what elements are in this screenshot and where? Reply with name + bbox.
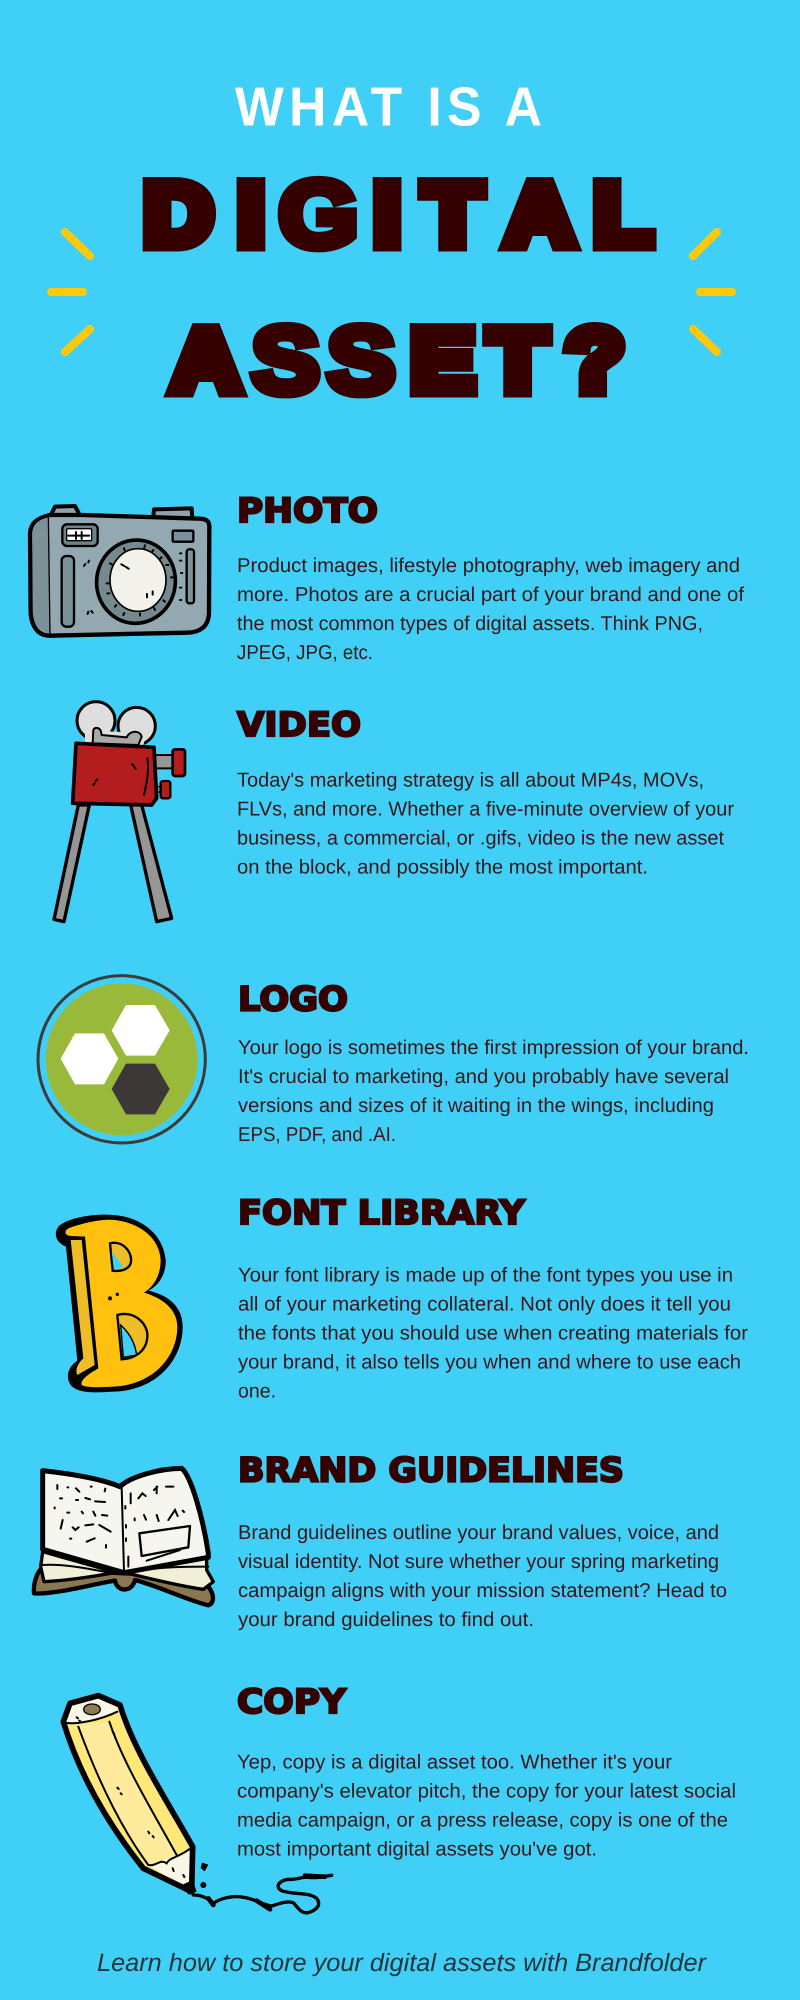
title line: what is a: WHAT IS A bbox=[235, 76, 542, 138]
title line: digital bbox=[144, 162, 652, 267]
title line: asset bbox=[172, 307, 624, 412]
text: brand guidelines description: Brand guidelines outline your brand values, voice, and bbox=[238, 1522, 719, 1544]
text: copy description: Yep, copy is a digital asset too. Whether it's your bbox=[237, 1752, 672, 1774]
text: copy description bbox=[237, 1752, 736, 1860]
text: copy description: media campaign, or a press release, copy is one of the bbox=[237, 1810, 728, 1832]
text: brand guidelines description: your brand guidelines to find out. bbox=[238, 1609, 534, 1631]
text: video description: FLVs, and more. Whether a five-minute overview of your bbox=[237, 798, 734, 820]
title bbox=[144, 76, 652, 412]
text: brand guidelines description bbox=[238, 1522, 727, 1631]
heading: photo: PHOTO bbox=[237, 491, 378, 530]
heading: copy: COPY bbox=[237, 1682, 347, 1721]
heading: brand guidelines: BRAND GUIDELINES bbox=[238, 1450, 624, 1490]
text: logo description: EPS, PDF, and .AI. bbox=[238, 1124, 396, 1146]
icon: letter B bbox=[56, 1215, 183, 1392]
text: font library description: your brand, it also tells you when and where to use each bbox=[238, 1352, 741, 1374]
text: copy description: most important digital assets you've got. bbox=[237, 1838, 597, 1860]
text: logo description: Your logo is sometimes the first impression of your brand. bbox=[238, 1037, 749, 1059]
text: photo description: JPEG, JPG, etc. bbox=[237, 642, 373, 664]
text: logo description bbox=[238, 1037, 749, 1146]
text: photo description: the most common types of digital assets. Think PNG, bbox=[237, 613, 703, 635]
icon: logo badge bbox=[38, 976, 205, 1143]
text: copy description: company's elevator pitch, the copy for your latest social bbox=[237, 1780, 736, 1802]
text: font library description bbox=[238, 1264, 748, 1402]
title line: asset: ET? bbox=[411, 310, 624, 409]
text: photo description: Product images, lifestyle photography, web imagery and bbox=[237, 555, 740, 577]
text: font library description: Your font library is made up of the font types you use in bbox=[238, 1264, 733, 1286]
heading: video: VIDEO bbox=[237, 705, 361, 744]
title line: digital: G bbox=[279, 162, 358, 267]
accent rays left bbox=[51, 232, 90, 352]
icon: film camera on tripod bbox=[54, 702, 185, 922]
text: photo description bbox=[237, 555, 744, 664]
text: photo description: more. Photos are a crucial part of your brand and one of bbox=[237, 584, 744, 606]
text: video description: on the block, and possibly the most important. bbox=[237, 856, 648, 878]
text: font library description: all of your marketing collateral. Not only does it tell you bbox=[238, 1294, 731, 1316]
text: video description: business, a commercial, or .gifs, video is the new asset bbox=[237, 828, 724, 850]
text: brand guidelines description: campaign aligns with your mission statement? Head to bbox=[238, 1580, 727, 1602]
title line: asset: A bbox=[172, 310, 240, 409]
heading: font library: FONT LIBRARY bbox=[238, 1193, 526, 1232]
heading: logo: LOGO bbox=[238, 980, 348, 1018]
text: video description bbox=[237, 770, 734, 878]
icon: camera bbox=[30, 506, 209, 636]
title line: asset: SS bbox=[252, 307, 395, 412]
text: logo description: versions and sizes of it waiting in the wings, including bbox=[238, 1095, 714, 1117]
title line: digital: ITAL bbox=[374, 165, 652, 264]
text: video description: Today's marketing strategy is all about MP4s, MOVs, bbox=[237, 770, 704, 792]
text: font library description: one. bbox=[238, 1380, 276, 1402]
text: font library description: the fonts that you should use when creating materials for bbox=[238, 1322, 748, 1344]
footer call to action: Learn how to store your digital assets with Brandfolder bbox=[97, 1949, 708, 1977]
title line: digital: DI bbox=[144, 165, 264, 264]
icon: pencil with scribble bbox=[63, 1696, 332, 1913]
icon: open book bbox=[34, 1468, 213, 1605]
text: logo description: It's crucial to marketing, and you probably have several bbox=[238, 1066, 729, 1088]
text: brand guidelines description: visual identity. Not sure whether your spring marketing bbox=[238, 1551, 719, 1573]
accent rays right bbox=[693, 232, 732, 352]
